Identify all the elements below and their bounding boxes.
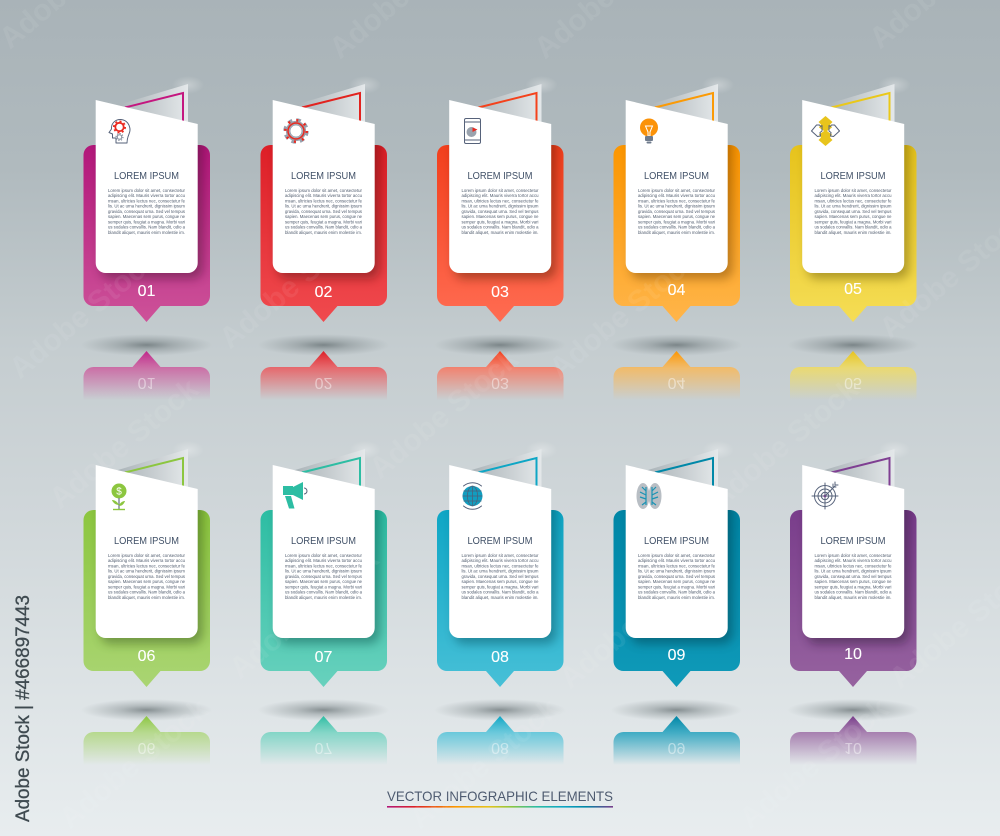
body text: msan, ultricies lectus nec, consectetur fe (462, 198, 539, 203)
body text: adipiscing elit. Mauris viverra tortor accu (108, 558, 185, 563)
body text: gravida, consequat urna. Sed vel tempus (462, 209, 539, 214)
body text (108, 553, 186, 600)
body text: lis. Ut ac urna hendrerit, dignissim ipsum (462, 569, 539, 574)
stock id side text: Adobe Stock | #466897443 (13, 595, 34, 822)
body text: semper quis, feugiat a magna. Morbi vari (814, 584, 892, 589)
icon: gear (285, 120, 307, 142)
icon: target (812, 482, 838, 509)
heading: LOREM IPSUM (291, 535, 356, 547)
number: 05 (844, 281, 862, 298)
body text: blandit aliquet, mauris enim molestie im. (638, 595, 715, 600)
card 03: 03 (491, 374, 509, 391)
body text: Lorem ipsum dolor sit amet, consectetur (462, 188, 539, 193)
card 08: 08 (491, 739, 509, 756)
body text: gravida, consequat urna. Sed vel tempus (814, 209, 892, 214)
card 06: 06 (138, 739, 156, 756)
body text: sapien. Maecenas sem purus, congue ne (638, 214, 715, 219)
body text: semper quis, feugiat a magna. Morbi vari (462, 219, 538, 224)
watermark: Adobe Stock (43, 372, 205, 515)
watermark: Adobe Stock (53, 692, 215, 835)
body text: Lorem ipsum dolor sit amet, consectetur (814, 188, 892, 193)
icon: money tree: $ (116, 487, 122, 498)
body text (108, 188, 186, 235)
body text: adipiscing elit. Mauris viverra tortor accu (462, 193, 539, 198)
icon: megaphone (283, 482, 307, 508)
number: 01 (138, 283, 156, 300)
body text: adipiscing elit. Mauris viverra tortor accu (285, 558, 362, 563)
card 07: 07 (315, 739, 332, 756)
body text: sapien. Maecenas sem purus, congue ne (462, 579, 539, 584)
body text: blandit aliquet, mauris enim molestie im. (638, 230, 715, 235)
body text: sapien. Maecenas sem purus, congue ne (814, 214, 892, 219)
watermark: Adobe Stock (363, 342, 525, 485)
body text: us sodales convallis. Nam blandit, odio a (814, 225, 892, 230)
card 01 (80, 76, 212, 402)
body text: Lorem ipsum dolor sit amet, consectetur (108, 553, 185, 558)
body text: gravida, consequat urna. Sed vel tempus (638, 574, 716, 579)
heading: LOREM IPSUM (291, 170, 356, 182)
body text: sapien. Maecenas sem purus, congue ne (285, 214, 362, 219)
body text (814, 188, 892, 235)
watermark: Adobe Stock (3, 242, 165, 385)
body text: us sodales convallis. Nam blandit, odio a (108, 590, 185, 595)
body text: blandit aliquet, mauris enim molestie im. (814, 230, 892, 235)
body text: Lorem ipsum dolor sit amet, consectetur (285, 553, 362, 558)
body text: adipiscing elit. Mauris viverra tortor accu (814, 558, 892, 563)
icon: tablet with pie chart (464, 118, 480, 144)
body text: blandit aliquet, mauris enim molestie im. (108, 230, 185, 235)
body text: Lorem ipsum dolor sit amet, consectetur (814, 553, 892, 558)
card 02: 02 (315, 374, 332, 391)
number: 04 (668, 282, 686, 299)
card 01: 01 (138, 374, 156, 391)
body text: gravida, consequat urna. Sed vel tempus (108, 574, 186, 579)
heading: LOREM IPSUM (820, 170, 886, 182)
body text: blandit aliquet, mauris enim molestie im. (285, 595, 362, 600)
card 04: 04 (668, 374, 686, 391)
icon: light bulb (640, 118, 658, 144)
icon: money tree (112, 484, 126, 510)
body text: us sodales convallis. Nam blandit, odio a (814, 590, 892, 595)
body text: lis. Ut ac urna hendrerit, dignissim ipsum (108, 569, 185, 574)
body text (285, 553, 363, 600)
body text: semper quis, feugiat a magna. Morbi vari (108, 584, 185, 589)
body text: msan, ultricies lectus nec, consectetur fe (814, 563, 892, 568)
heading: LOREM IPSUM (114, 170, 179, 182)
body text: lis. Ut ac urna hendrerit, dignissim ipsum (285, 569, 362, 574)
body text: adipiscing elit. Mauris viverra tortor accu (638, 193, 715, 198)
body text: gravida, consequat urna. Sed vel tempus (814, 574, 892, 579)
body text: semper quis, feugiat a magna. Morbi vari (462, 584, 538, 589)
body text: lis. Ut ac urna hendrerit, dignissim ipsum (638, 204, 715, 209)
body text: msan, ultricies lectus nec, consectetur fe (285, 563, 362, 568)
body text (285, 188, 363, 235)
number: 03 (491, 284, 509, 301)
body text: blandit aliquet, mauris enim molestie im. (285, 230, 362, 235)
body text: adipiscing elit. Mauris viverra tortor accu (814, 193, 892, 198)
number: 09 (668, 647, 686, 664)
body text: lis. Ut ac urna hendrerit, dignissim ipsum (814, 569, 892, 574)
body text: msan, ultricies lectus nec, consectetur fe (108, 563, 185, 568)
body text: lis. Ut ac urna hendrerit, dignissim ipsum (462, 204, 539, 209)
watermark: Adobe Stock (223, 542, 385, 685)
body text (814, 553, 892, 600)
heading: LOREM IPSUM (644, 170, 709, 182)
watermark: Adobe Stock (543, 242, 705, 385)
body text: adipiscing elit. Mauris viverra tortor accu (638, 558, 715, 563)
card 03 (434, 76, 566, 402)
heading: LOREM IPSUM (820, 535, 886, 547)
body text: msan, ultricies lectus nec, consectetur fe (638, 198, 715, 203)
body text: adipiscing elit. Mauris viverra tortor accu (108, 193, 185, 198)
body text (638, 188, 716, 235)
heading: LOREM IPSUM (644, 535, 709, 547)
body text: sapien. Maecenas sem purus, congue ne (285, 579, 362, 584)
body text: msan, ultricies lectus nec, consectetur fe (814, 198, 892, 203)
heading: LOREM IPSUM (468, 170, 532, 182)
body text: sapien. Maecenas sem purus, congue ne (108, 579, 185, 584)
body text: Lorem ipsum dolor sit amet, consectetur (108, 188, 185, 193)
card 02 (258, 76, 390, 402)
body text: gravida, consequat urna. Sed vel tempus (285, 209, 363, 214)
body text: lis. Ut ac urna hendrerit, dignissim ipsum (108, 204, 185, 209)
body text: msan, ultricies lectus nec, consectetur fe (462, 563, 539, 568)
heading: LOREM IPSUM (468, 535, 532, 547)
watermark: Adobe Stock (553, 552, 715, 695)
body text: adipiscing elit. Mauris viverra tortor accu (462, 558, 539, 563)
number: 08 (491, 649, 509, 666)
body text: sapien. Maecenas sem purus, congue ne (814, 579, 892, 584)
body text: semper quis, feugiat a magna. Morbi vari (285, 584, 362, 589)
body text: gravida, consequat urna. Sed vel tempus (638, 209, 716, 214)
body text: gravida, consequat urna. Sed vel tempus (108, 209, 186, 214)
body text: semper quis, feugiat a magna. Morbi vari (638, 584, 715, 589)
number: 02 (315, 284, 332, 301)
body text: msan, ultricies lectus nec, consectetur fe (638, 563, 715, 568)
body text: Lorem ipsum dolor sit amet, consectetur (462, 553, 539, 558)
body text: blandit aliquet, mauris enim molestie im. (814, 595, 892, 600)
body text: blandit aliquet, mauris enim molestie im. (462, 595, 538, 600)
body text (462, 188, 539, 235)
body text: us sodales convallis. Nam blandit, odio a (638, 225, 715, 230)
number: 07 (315, 649, 332, 666)
body text: lis. Ut ac urna hendrerit, dignissim ipsum (814, 204, 892, 209)
body text: sapien. Maecenas sem purus, congue ne (638, 579, 715, 584)
card 10: 10 (844, 739, 862, 756)
body text: semper quis, feugiat a magna. Morbi vari (814, 219, 892, 224)
body text (638, 553, 716, 600)
body text: us sodales convallis. Nam blandit, odio a (285, 590, 362, 595)
body text: Lorem ipsum dolor sit amet, consectetur (638, 553, 715, 558)
body text: semper quis, feugiat a magna. Morbi vari (638, 219, 715, 224)
body text: gravida, consequat urna. Sed vel tempus (285, 574, 363, 579)
body text: us sodales convallis. Nam blandit, odio a (285, 225, 362, 230)
body text: adipiscing elit. Mauris viverra tortor accu (285, 193, 362, 198)
card 09 (610, 441, 742, 767)
body text: us sodales convallis. Nam blandit, odio a (462, 590, 539, 595)
body text: msan, ultricies lectus nec, consectetur fe (108, 198, 185, 203)
card 07 (258, 441, 390, 767)
card 04 (610, 76, 742, 402)
icon: brain (636, 483, 662, 509)
watermark: Adobe Stock (403, 692, 565, 835)
footer title: VECTOR INFOGRAPHIC ELEMENTS (387, 788, 613, 804)
card 09: 09 (668, 739, 686, 756)
body text: lis. Ut ac urna hendrerit, dignissim ipsum (285, 204, 362, 209)
card 10 (787, 441, 919, 767)
number: 10 (844, 646, 862, 663)
icon: globe (462, 483, 482, 509)
body text: blandit aliquet, mauris enim molestie im. (108, 595, 185, 600)
card 08 (434, 441, 566, 767)
number: 06 (138, 648, 156, 665)
body text: sapien. Maecenas sem purus, congue ne (108, 214, 185, 219)
watermark: Adobe Stock (213, 212, 375, 355)
watermark: Adobe Stock (703, 372, 865, 515)
body text: blandit aliquet, mauris enim molestie im. (462, 230, 538, 235)
icon: puzzle arrows (812, 116, 840, 146)
body text: semper quis, feugiat a magna. Morbi vari (108, 219, 185, 224)
card 05: 05 (844, 374, 862, 391)
body text: us sodales convallis. Nam blandit, odio a (638, 590, 715, 595)
body text: semper quis, feugiat a magna. Morbi vari (285, 219, 362, 224)
card 05 (787, 76, 919, 402)
icon: head with gears (109, 119, 130, 143)
body text: lis. Ut ac urna hendrerit, dignissim ipsum (638, 569, 715, 574)
body text: gravida, consequat urna. Sed vel tempus (462, 574, 539, 579)
card 06 (80, 441, 212, 767)
body text: us sodales convallis. Nam blandit, odio a (108, 225, 185, 230)
body text (462, 553, 539, 600)
body text: sapien. Maecenas sem purus, congue ne (462, 214, 539, 219)
body text: us sodales convallis. Nam blandit, odio a (462, 225, 539, 230)
body text: msan, ultricies lectus nec, consectetur fe (285, 198, 362, 203)
watermark: Adobe Stock (733, 692, 895, 835)
heading: LOREM IPSUM (114, 535, 179, 547)
body text: Lorem ipsum dolor sit amet, consectetur (638, 188, 715, 193)
body text: Lorem ipsum dolor sit amet, consectetur (285, 188, 362, 193)
